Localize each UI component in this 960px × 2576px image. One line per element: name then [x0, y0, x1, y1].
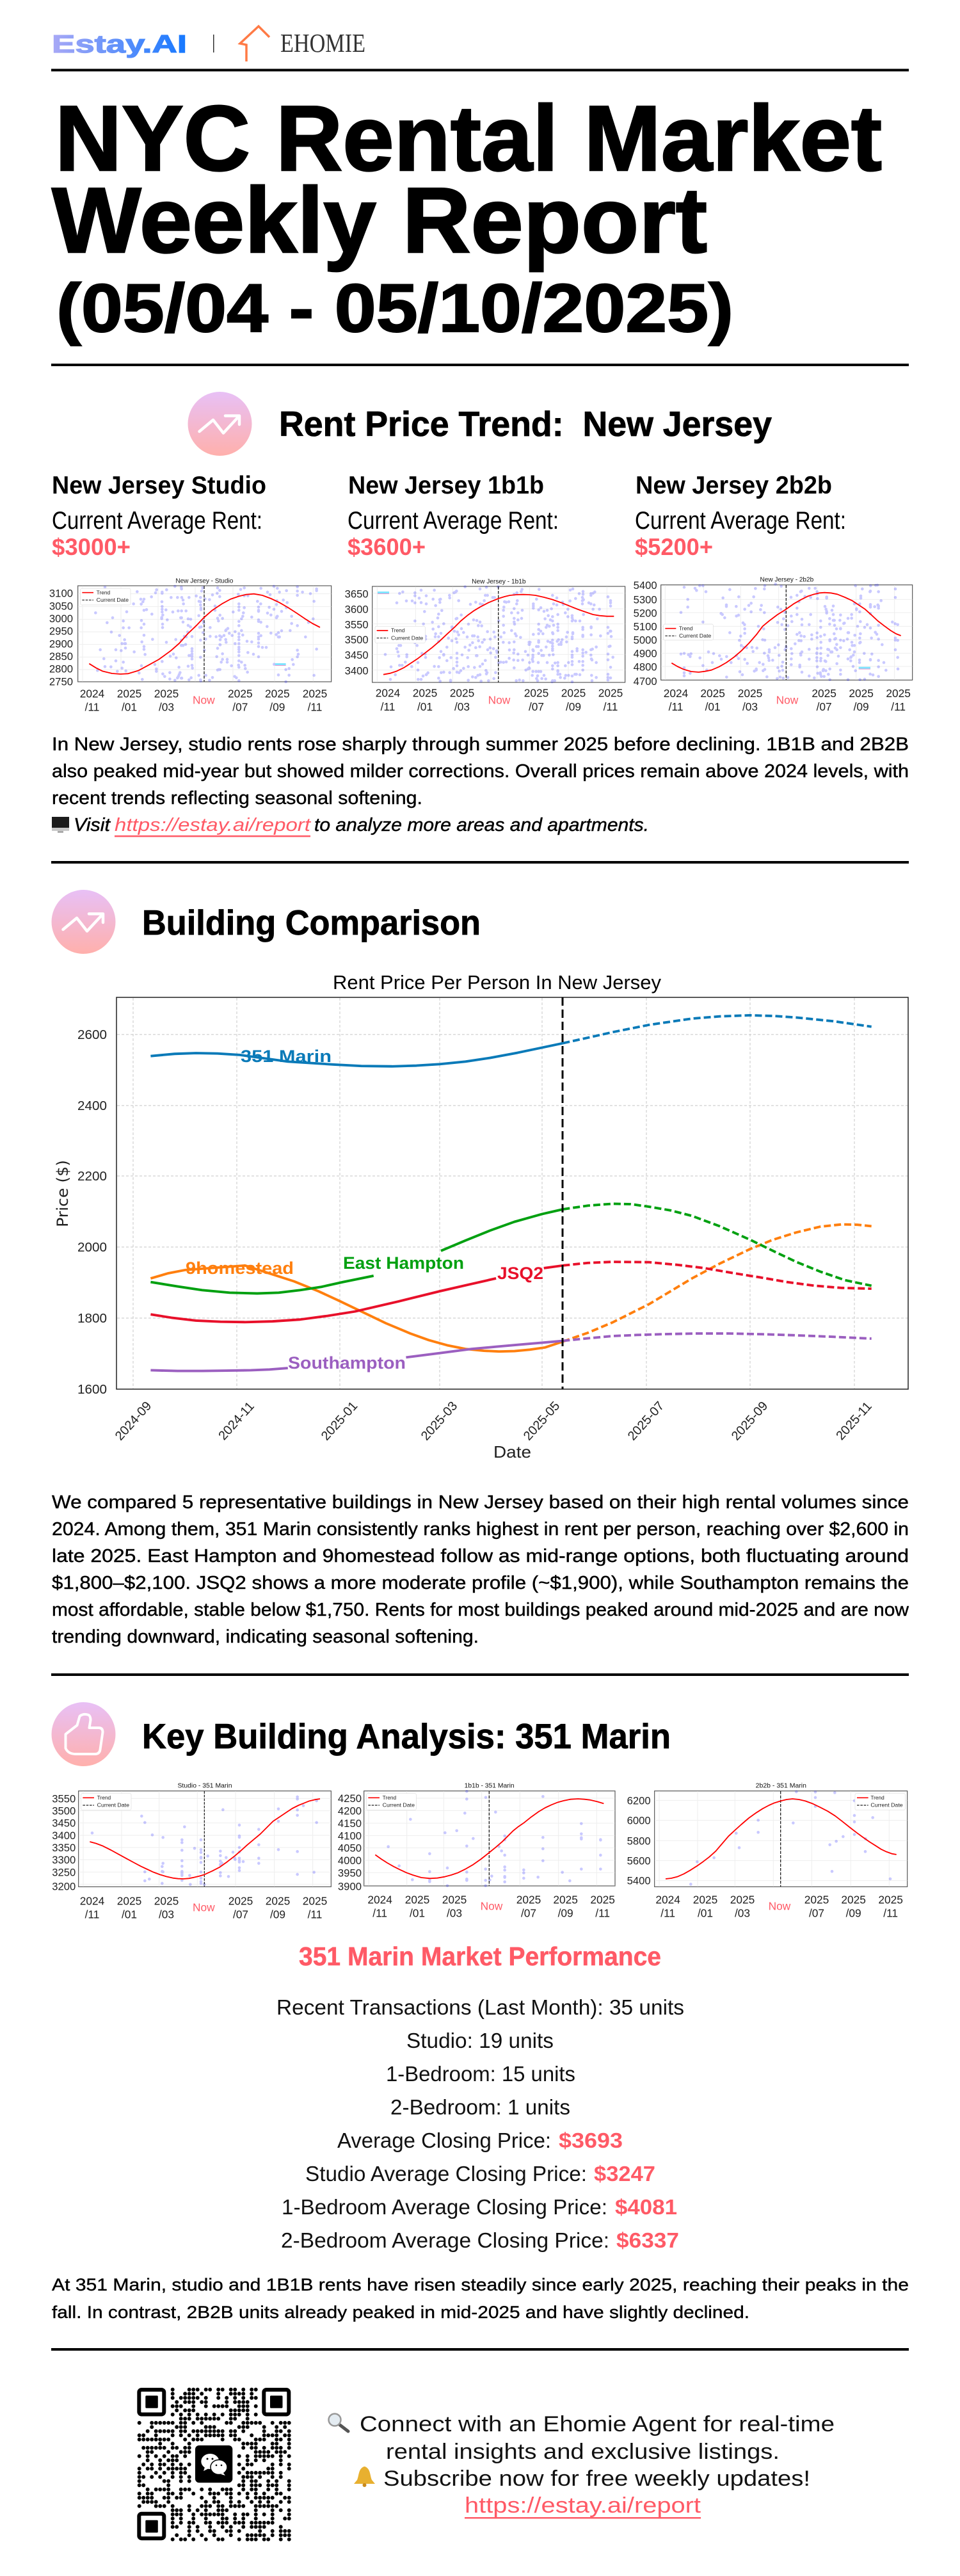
text block: building comparison summary: trending downward, indicating seasonal softening. — [52, 1627, 479, 1647]
chart: 2b2b 351 Marin: 2025 — [730, 1893, 755, 1906]
price column: 1b1b: Current Average Rent: — [348, 507, 559, 535]
chart: New Jersey 1b1b: 3650 — [345, 588, 369, 600]
x axis labels: 2025-01 — [319, 1399, 360, 1444]
chart: Studio 351 Marin: 3350 — [52, 1842, 76, 1854]
chart: New Jersey Studio: 2025 — [265, 687, 290, 700]
line: 9homestead — [150, 1225, 872, 1351]
text block: building comparison summary: late 2025. East Hampton and 9homestead follow as mid-range options, both fluctuating around — [52, 1546, 909, 1566]
x axis labels: 2025-09 — [729, 1399, 771, 1444]
x axis labels: 2025-03 — [419, 1399, 460, 1444]
chart: New Jersey 2b2b: 2025 — [812, 687, 836, 700]
call to action: visit link — [52, 815, 649, 837]
chart: New Jersey 1b1b: 2025 — [598, 687, 623, 700]
chart: New Jersey Studio: 2800 — [49, 663, 73, 675]
icon: trend arrow — [188, 392, 252, 456]
y axis labels: 1600 — [77, 1383, 107, 1397]
chart: 1b1b 351 Marin: 2025 — [553, 1893, 578, 1906]
list: transaction stats — [276, 1995, 684, 2252]
chart: 2b2b 351 Marin: 6000 — [627, 1815, 651, 1827]
chart: 2b2b 351 Marin: 2025 — [693, 1893, 717, 1906]
icon: bell — [354, 2467, 375, 2487]
logo: Estay.AI: Estay.AI — [52, 31, 187, 58]
icon: monitor — [52, 817, 69, 833]
chart: New Jersey Studio: 2950 — [49, 625, 73, 638]
chart: Studio 351 Marin: 3200 — [52, 1881, 76, 1893]
list: transaction stats: $3247 — [594, 2162, 655, 2186]
list: transaction stats: $4081 — [615, 2195, 677, 2219]
chart: New Jersey Studio: 3100 — [49, 587, 73, 599]
chart: Studio 351 Marin: /07 — [233, 1908, 248, 1921]
title: NYC Rental Market — [55, 86, 882, 190]
y axis labels: 2200 — [77, 1170, 107, 1184]
chart: Studio 351 Marin: Now — [193, 1901, 215, 1914]
price column: 1b1b: New Jersey 1b1b — [348, 472, 544, 499]
chart: 2b2b 351 Marin: 5600 — [627, 1855, 651, 1867]
chart: 2b2b 351 Marin: /11 — [660, 1906, 675, 1919]
section heading: Building Comparison — [51, 890, 481, 954]
chart: Studio 351 Marin: /11 — [85, 1908, 99, 1921]
label: East Hampton: East Hampton — [343, 1253, 464, 1273]
chart: New Jersey 2b2b: /01 — [705, 700, 721, 713]
chart: New Jersey Studio: 2750 — [49, 676, 73, 688]
y axis labels: 2400 — [77, 1099, 107, 1113]
chart: New Jersey Studio: Current Date — [97, 597, 129, 603]
chart: New Jersey 2b2b: New Jersey - 2b2b — [760, 576, 813, 583]
chart: New Jersey 1b1b: /07 — [529, 700, 544, 713]
chart: New Jersey 2b2b: 5300 — [634, 594, 657, 606]
chart: New Jersey 2b2b: 4800 — [634, 661, 657, 673]
price column: 2b2b: Current Average Rent: — [635, 507, 846, 535]
chart: New Jersey 2b2b: 4700 — [634, 675, 657, 688]
axis title: Date: Date — [493, 1442, 531, 1461]
x axis labels: 2024-09 — [113, 1399, 154, 1444]
chart: 1b1b 351 Marin: Now — [481, 1899, 503, 1912]
chart: 1b1b 351 Marin: 4000 — [338, 1855, 362, 1867]
chart: New Jersey 2b2b: 5200 — [634, 607, 657, 619]
chart: New Jersey Studio: 3000 — [49, 613, 73, 625]
chart: 1b1b 351 Marin: /01 — [410, 1906, 425, 1919]
chart: New Jersey 1b1b: /11 — [381, 700, 395, 713]
chart: 1b1b 351 Marin: 2025 — [516, 1893, 541, 1906]
chart: 2b2b 351 Marin: 2025 — [878, 1893, 903, 1906]
chart: Studio 351 Marin: 3400 — [52, 1830, 76, 1842]
chart: New Jersey 1b1b: 2025 — [413, 687, 437, 700]
price column: 1b1b — [348, 472, 559, 560]
chart: 1b1b 351 Marin: /11 — [595, 1906, 610, 1919]
chart: Studio 351 Marin: 3300 — [52, 1854, 76, 1866]
y axis labels — [77, 1028, 107, 1397]
chart: New Jersey 2b2b: 2025 — [700, 687, 725, 700]
price column: Studio: $3000+ — [52, 534, 131, 560]
chart: New Jersey 1b1b: New Jersey - 1b1b — [472, 579, 526, 586]
chart: New Jersey 1b1b: /11 — [604, 700, 618, 713]
chart: New Jersey Studio: Trend — [97, 589, 110, 595]
list: transaction stats: Average Closing Price: — [337, 2129, 551, 2152]
line: JSQ2 — [150, 1262, 872, 1322]
chart: Studio 351 Marin: /03 — [159, 1908, 174, 1921]
chart: New Jersey 1b1b: 3500 — [345, 634, 369, 646]
heading text: Rent Price Trend: New Jersey — [279, 404, 772, 444]
text block: building comparison summary: We compared 5 representative buildings in New Jersey based on their high rental volumes since — [52, 1492, 909, 1513]
chart: 1b1b 351 Marin: /11 — [372, 1906, 387, 1919]
text block: building comparison summary: 2024. Among them, 351 Marin consistently ranks highest in rent per person, reaching over $2,600 in — [52, 1519, 909, 1540]
chart: New Jersey 1b1b: 3600 — [345, 604, 369, 616]
line: 351 Marin — [150, 1015, 872, 1067]
chart: New Jersey 2b2b — [634, 576, 913, 713]
heading: market performance: 351 Marin Market Performance — [299, 1942, 661, 1971]
price column: 2b2b: $5200+ — [635, 534, 713, 560]
now marker — [562, 997, 563, 1389]
y axis labels: 2600 — [77, 1028, 107, 1042]
chart: New Jersey 2b2b: /07 — [817, 700, 832, 713]
x axis labels: 2025-11 — [833, 1399, 875, 1443]
y axis labels: 2000 — [77, 1241, 107, 1255]
chart: New Jersey 2b2b: 5100 — [634, 621, 657, 633]
line: East Hampton — [150, 1203, 872, 1293]
chart: New Jersey Studio: 2025 — [154, 687, 179, 700]
chart: 2b2b 351 Marin: 2b2b - 351 Marin — [756, 1783, 806, 1790]
heading text: Building Comparison — [142, 903, 481, 942]
price column: Studio: New Jersey Studio — [52, 472, 266, 499]
list: transaction stats: 2-Bedroom Average Closing Price: — [281, 2228, 609, 2252]
chart: New Jersey 1b1b: 3400 — [345, 664, 369, 677]
x axis labels — [113, 1399, 875, 1444]
chart: Studio 351 Marin: /11 — [308, 1908, 322, 1921]
text block: 351 Marin summary: At 351 Marin, studio and 1B1B rents have risen steadily since early 2025, reaching their peaks in the — [52, 2275, 909, 2294]
list: transaction stats: Studio: 19 units — [406, 2029, 554, 2052]
chart: 1b1b 351 Marin: 3950 — [338, 1867, 362, 1879]
chart: New Jersey 1b1b: 2025 — [450, 687, 474, 700]
chart: New Jersey 1b1b: Current Date — [391, 634, 424, 641]
price column: 2b2b — [635, 472, 846, 560]
QR code — [139, 2390, 289, 2540]
price column: Studio — [52, 472, 266, 560]
chart: New Jersey Studio: Now — [193, 693, 215, 706]
chart: New Jersey Studio — [49, 578, 332, 714]
chart: New Jersey Studio: /03 — [159, 701, 174, 714]
chart: New Jersey Studio: /09 — [269, 701, 285, 714]
chart: New Jersey 1b1b: /01 — [417, 700, 433, 713]
list: transaction stats: Recent Transactions (Last Month): 35 units — [276, 1995, 684, 2019]
chart: 2b2b 351 Marin: Current Date — [870, 1802, 903, 1808]
chart: 1b1b 351 Marin: 1b1b - 351 Marin — [465, 1783, 515, 1790]
chart: Studio 351 Marin: 3550 — [52, 1792, 76, 1805]
chart: New Jersey 2b2b: 2025 — [849, 687, 874, 700]
heading text: Key Building Analysis: 351 Marin — [142, 1716, 671, 1756]
chart: New Jersey 1b1b: 3450 — [345, 649, 369, 661]
chart: New Jersey 2b2b: 2025 — [886, 687, 911, 700]
chart: New Jersey 2b2b: 5400 — [634, 579, 657, 592]
chart: 1b1b 351 Marin: Trend — [383, 1794, 396, 1801]
chart: 1b1b 351 Marin: /07 — [521, 1906, 536, 1919]
chart: 1b1b 351 Marin: Current Date — [383, 1802, 415, 1808]
text block: New Jersey summary — [52, 734, 909, 809]
text block: building comparison summary: most affordable, stable below $1,750. Rents for most buildings peaked around mid-2025 and are now — [52, 1600, 909, 1620]
text block: 351 Marin summary — [52, 2275, 909, 2322]
chart: New Jersey Studio: /11 — [85, 701, 99, 714]
call to action: connect text: rental insights and exclusive listings. — [386, 2440, 780, 2464]
chart: New Jersey Studio: /07 — [232, 701, 248, 714]
chart: Studio 351 Marin: Studio - 351 Marin — [177, 1783, 232, 1790]
chart: Studio 351 Marin: 2025 — [228, 1895, 253, 1908]
chart: 1b1b 351 Marin: /09 — [558, 1906, 573, 1919]
chart: 1b1b 351 Marin: 4050 — [338, 1842, 362, 1855]
chart: New Jersey 1b1b: Now — [488, 693, 511, 706]
chart: 2b2b 351 Marin: /03 — [735, 1906, 750, 1919]
chart: New Jersey Studio: 2024 — [80, 687, 105, 700]
text block: New Jersey summary: recent trends reflecting seasonal softening. — [52, 788, 422, 809]
chart: 1b1b 351 Marin: 4200 — [338, 1805, 362, 1817]
header logos — [52, 26, 365, 61]
price column: Studio: Current Average Rent: — [52, 507, 262, 535]
chart: New Jersey 2b2b: 2024 — [664, 687, 689, 700]
chart: New Jersey Studio: 2025 — [117, 687, 141, 700]
chart: 2b2b 351 Marin: /11 — [883, 1906, 898, 1919]
logo: Ehomie house icon — [240, 26, 269, 61]
chart: New Jersey 2b2b: 2025 — [738, 687, 762, 700]
chart: 2b2b 351 Marin: 5400 — [627, 1875, 651, 1887]
chart: New Jersey Studio: 2900 — [49, 638, 73, 650]
icon: trend arrow — [51, 890, 115, 954]
chart: 1b1b 351 Marin: 4150 — [338, 1817, 362, 1830]
chart: New Jersey 1b1b: 2025 — [561, 687, 586, 700]
list: transaction stats: 2-Bedroom: 1 units — [390, 2095, 570, 2119]
chart: Studio 351 Marin: 2025 — [303, 1895, 327, 1908]
label: 351 Marin: 351 Marin — [241, 1047, 332, 1066]
section heading: Rent Price Trend — [188, 392, 772, 456]
label: Southampton: Southampton — [288, 1353, 406, 1373]
icon: thumbs up — [51, 1702, 115, 1766]
x axis labels: 2024-11 — [216, 1399, 257, 1443]
chart: 2b2b 351 Marin: 5800 — [627, 1835, 651, 1847]
axis title: Price: Price ($) — [54, 1160, 72, 1227]
chart: New Jersey 2b2b: 5000 — [634, 634, 657, 647]
chart: Studio 351 Marin: Current Date — [97, 1802, 129, 1808]
chart: New Jersey 1b1b — [345, 579, 625, 713]
chart: 1b1b 351 Marin — [338, 1783, 615, 1919]
chart: 1b1b 351 Marin: 4100 — [338, 1830, 362, 1842]
call to action: connect text — [329, 2412, 835, 2518]
chart: 2b2b 351 Marin — [627, 1783, 908, 1919]
chart: New Jersey 1b1b: 2025 — [524, 687, 548, 700]
chart: New Jersey Studio: /01 — [122, 701, 137, 714]
chart: 2b2b 351 Marin: /09 — [846, 1906, 861, 1919]
line: Southampton — [150, 1333, 872, 1371]
icon: WeChat logo — [195, 2445, 232, 2483]
chart: 1b1b 351 Marin: /03 — [447, 1906, 462, 1919]
chart: Studio 351 Marin: Trend — [97, 1794, 111, 1801]
call to action: visit link: Visit — [74, 815, 111, 835]
chart: 2b2b 351 Marin: Trend — [870, 1794, 884, 1801]
list: transaction stats: 1-Bedroom: 15 units — [386, 2062, 575, 2086]
chart: New Jersey Studio: 2850 — [49, 650, 73, 663]
chart: New Jersey 2b2b: Trend — [679, 625, 693, 631]
chart: 1b1b 351 Marin: 2025 — [590, 1893, 615, 1906]
logo: Ehomie wordmark: EHOMIE — [280, 28, 365, 58]
text block: New Jersey summary: also peaked mid-year but showed milder corrections. Overall prices remain above 2024 levels, with — [52, 761, 909, 782]
chart: New Jersey 1b1b: /03 — [454, 700, 470, 713]
chart: New Jersey Studio: /11 — [308, 701, 322, 714]
chart: Studio 351 Marin: 2025 — [154, 1895, 179, 1908]
chart: Studio 351 Marin: 3500 — [52, 1805, 76, 1817]
chart title: Rent Price Per Person In New Jersey — [333, 971, 661, 994]
icon: magnifying glass — [329, 2413, 348, 2431]
text block: building comparison summary — [52, 1492, 909, 1647]
chart: Studio 351 Marin — [52, 1783, 331, 1921]
chart: New Jersey 2b2b: /09 — [854, 700, 869, 713]
chart: Studio 351 Marin: 3250 — [52, 1866, 76, 1878]
chart: New Jersey Studio: 2025 — [228, 687, 253, 700]
list: transaction stats: Studio Average Closing Price: — [305, 2162, 587, 2186]
chart: New Jersey Studio: New Jersey - Studio — [175, 578, 234, 585]
chart: 2b2b 351 Marin: /01 — [698, 1906, 713, 1919]
chart: New Jersey 2b2b: /03 — [742, 700, 758, 713]
price column: 2b2b: New Jersey 2b2b — [636, 472, 832, 499]
chart: 2b2b 351 Marin: 6200 — [627, 1794, 651, 1807]
x axis labels: 2025-07 — [625, 1399, 667, 1444]
chart: New Jersey 1b1b: 2024 — [376, 687, 401, 700]
list: transaction stats: 1-Bedroom Average Closing Price: — [282, 2195, 607, 2219]
chart: 2b2b 351 Marin: 2024 — [655, 1893, 680, 1906]
chart: 1b1b 351 Marin: 4250 — [338, 1792, 362, 1805]
chart: 2b2b 351 Marin: /07 — [809, 1906, 824, 1919]
chart: 1b1b 351 Marin: 2024 — [367, 1893, 392, 1906]
text block: building comparison summary: $1,800–$2,100. JSQ2 shows a more moderate profile (~$1,900), while Southampton remains the — [52, 1573, 909, 1593]
title — [52, 86, 882, 346]
chart: Studio 351 Marin: 2025 — [117, 1895, 141, 1908]
price column: 1b1b: $3600+ — [348, 534, 426, 560]
call to action: connect text: Subscribe now for free weekly updates! — [383, 2467, 810, 2491]
chart: 2b2b 351 Marin: 2025 — [804, 1893, 829, 1906]
list: transaction stats: $3693 — [559, 2129, 623, 2152]
call to action: connect text: Connect with an Ehomie Agent for real-time — [360, 2412, 835, 2436]
chart: Studio 351 Marin: 2024 — [80, 1895, 105, 1908]
text block: 351 Marin summary: fall. In contrast, 2B2B units already peaked in mid-2025 and have slightly declined. — [52, 2303, 749, 2322]
chart: New Jersey Studio: 3050 — [49, 600, 73, 612]
list: transaction stats: $6337 — [616, 2228, 679, 2252]
chart: Studio 351 Marin: /01 — [122, 1908, 137, 1921]
chart: New Jersey 1b1b: Trend — [391, 627, 405, 634]
x axis labels: 2025-05 — [521, 1399, 563, 1444]
chart: New Jersey 2b2b: Now — [776, 694, 799, 707]
call to action: visit link: to analyze more areas and apartments. — [314, 815, 649, 835]
chart: New Jersey Studio: 2025 — [303, 687, 327, 700]
chart: Studio 351 Marin: 3450 — [52, 1817, 76, 1830]
y axis labels: 1800 — [77, 1312, 107, 1326]
chart: 1b1b 351 Marin: 2025 — [405, 1893, 429, 1906]
label: 9homestead: 9homestead — [186, 1259, 294, 1278]
chart: New Jersey 2b2b: /11 — [669, 700, 683, 713]
text block: New Jersey summary: In New Jersey, studio rents rose sharply through summer 2025 before declining. 1B1B and 2B2B — [52, 734, 909, 755]
chart: Studio 351 Marin: /09 — [270, 1908, 285, 1921]
chart: New Jersey 2b2b: 4900 — [634, 648, 657, 660]
chart: New Jersey 1b1b: /09 — [566, 700, 581, 713]
chart: New Jersey 1b1b: 3550 — [345, 618, 369, 631]
section heading: Key Building Analysis — [51, 1702, 671, 1766]
chart: New Jersey 2b2b: Current Date — [679, 632, 712, 639]
chart: 1b1b 351 Marin: 2025 — [442, 1893, 467, 1906]
call to action: visit link: https://estay.ai/report — [115, 815, 312, 835]
line chart: rent price per person — [54, 971, 908, 1461]
call to action: connect text: https://estay.ai/report — [465, 2493, 701, 2518]
chart: New Jersey 2b2b: /11 — [891, 700, 906, 713]
title: Weekly Report — [52, 168, 707, 272]
chart: 2b2b 351 Marin: 2025 — [841, 1893, 866, 1906]
chart: 1b1b 351 Marin: 3900 — [338, 1881, 362, 1893]
label: JSQ2: JSQ2 — [497, 1264, 543, 1283]
chart: 2b2b 351 Marin: Now — [769, 1899, 791, 1912]
chart: Studio 351 Marin: 2025 — [266, 1895, 290, 1908]
title: (05/04 - 05/10/2025) — [56, 270, 733, 346]
